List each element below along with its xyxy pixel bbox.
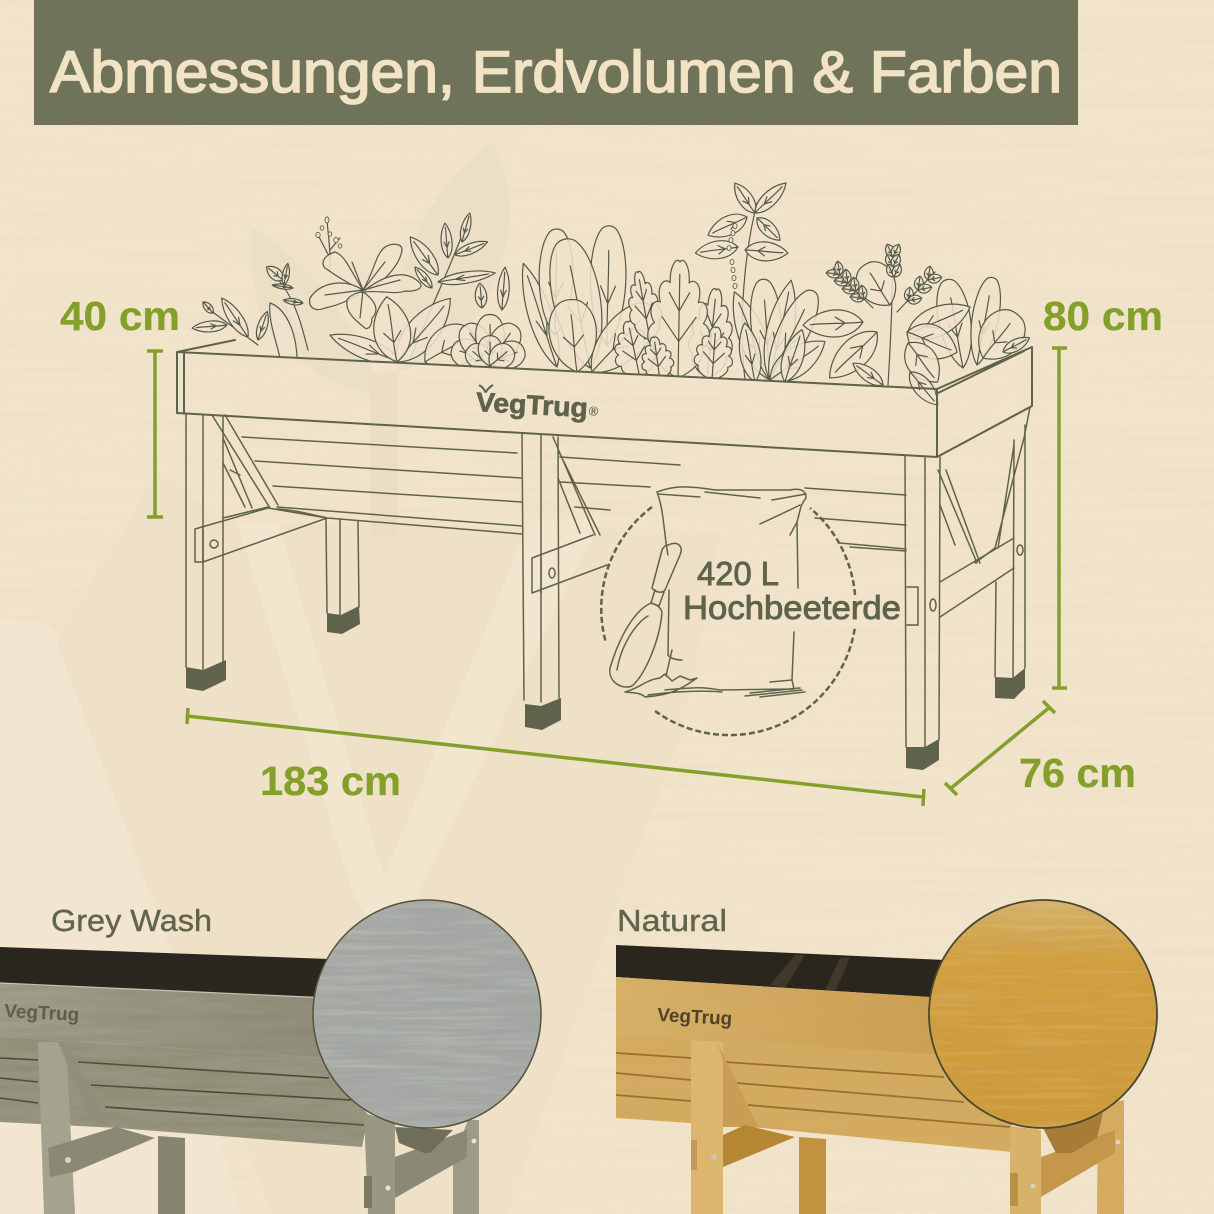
photo: grey wash bed: VegTrug: [4, 1001, 80, 1026]
colour option: natural: [616, 900, 1160, 1214]
colour option: grey wash: [0, 900, 545, 1214]
label: Natural: Natural: [617, 903, 727, 938]
photo: natural bed: VegTrug: [657, 1005, 733, 1030]
trough planks: [242, 437, 906, 551]
dimension: 40 cm: [60, 293, 180, 517]
left front leg: [186, 414, 223, 670]
top board: [177, 340, 1032, 457]
VegTrug logo on board: ®: [588, 403, 599, 419]
photo: grey wash bed: [0, 947, 480, 1214]
dimension: 80 cm: 80 cm: [1043, 293, 1163, 339]
raised bed line drawing: [177, 340, 1032, 747]
plants illustration: [192, 178, 1034, 392]
right crossbar: [940, 538, 1014, 617]
dimension: 76 cm: [945, 701, 1136, 796]
watermark logo shape: [0, 143, 720, 1214]
soil volume label: 420 L: [697, 555, 779, 592]
dashed circle: [601, 507, 855, 735]
label: Grey Wash: Grey Wash: [51, 903, 212, 938]
title banner: [34, 0, 1078, 125]
dimension: 183 cm: [187, 708, 924, 806]
photo: natural bed: [616, 945, 1126, 1214]
dimension: 40 cm: 40 cm: [60, 293, 180, 339]
end of trough: [937, 407, 1030, 563]
swatch: grey wash texture: [310, 900, 545, 1130]
title: Abmessungen, Erdvolumen & Farben: [50, 40, 1062, 105]
VegTrug logo on board: VegTrug: [475, 387, 589, 423]
soil volume label: [683, 555, 901, 626]
soil bag illustration: [610, 487, 806, 697]
centre crossbar: [532, 535, 607, 593]
dimension: 80 cm: [1043, 293, 1163, 688]
right rear leg: [995, 425, 1025, 678]
leg feet: [186, 606, 1025, 770]
swatch: natural texture: [925, 900, 1160, 1130]
soil volume label: Hochbeeterde: [683, 589, 901, 626]
left brace: [212, 415, 278, 508]
dimension: 76 cm: 76 cm: [1019, 750, 1136, 796]
dimension: 183 cm: 183 cm: [260, 758, 401, 804]
centre leg: [522, 434, 559, 702]
left rear leg: [326, 519, 359, 615]
left crossbar: [195, 507, 327, 562]
centre brace: [553, 437, 600, 535]
right front leg: [905, 456, 940, 747]
overhanging leaf: [903, 366, 944, 411]
